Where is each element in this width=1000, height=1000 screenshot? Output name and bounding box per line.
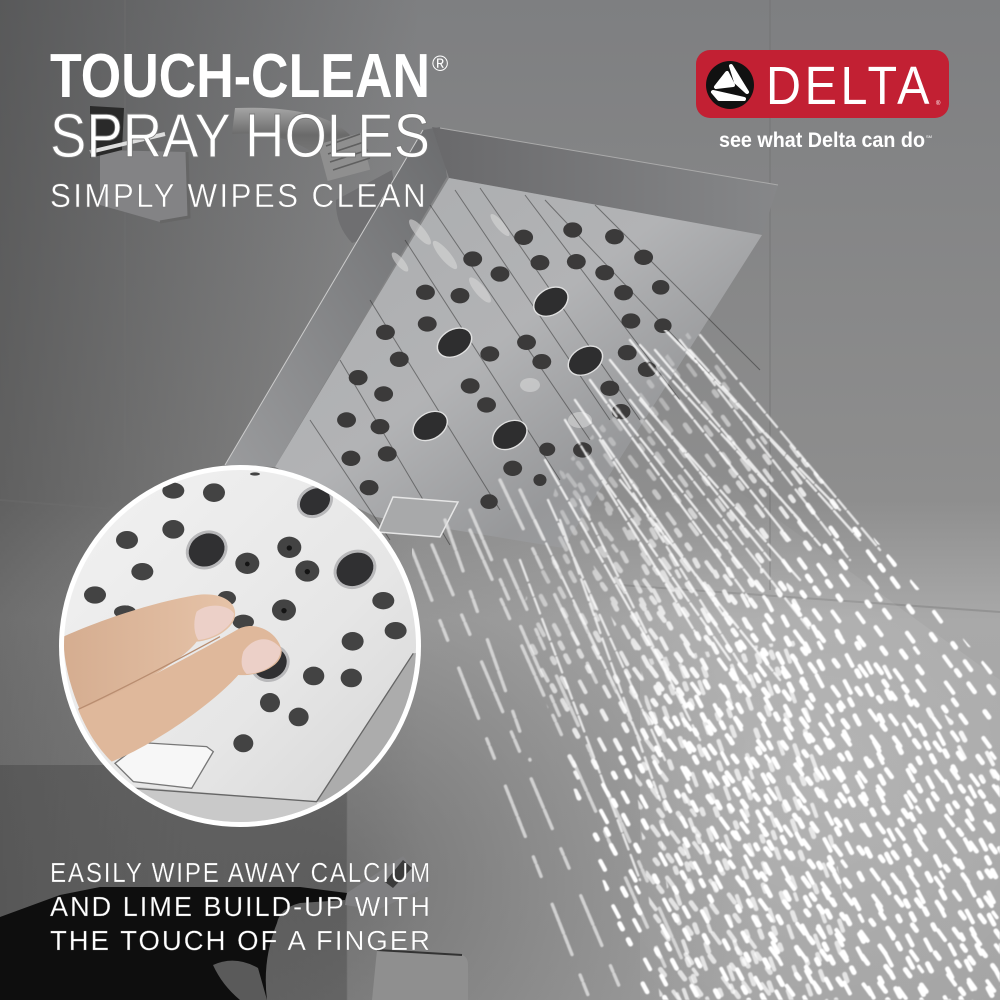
spray dashes	[520, 330, 1000, 1000]
logo mark	[706, 61, 754, 109]
head button	[378, 497, 458, 537]
fingers	[63, 594, 235, 710]
spray streaks	[412, 330, 880, 1000]
head face	[275, 178, 762, 548]
shower arm	[90, 106, 400, 243]
inset button	[115, 743, 213, 788]
title: SPRAY HOLES	[50, 102, 430, 171]
inset large spray holes	[181, 481, 382, 687]
Delta logo: SM	[926, 134, 932, 139]
caption: EASILY WIPE AWAY CALCIUM	[50, 857, 432, 888]
caption: AND LIME BUILD-UP WITH	[50, 891, 432, 922]
Delta logo	[696, 50, 949, 152]
head frame	[225, 127, 447, 467]
title: TOUCH-CLEAN	[50, 42, 430, 111]
Delta logo: ®	[936, 100, 941, 107]
caption: THE TOUCH OF A FINGER	[50, 925, 432, 956]
inset area outside head	[318, 653, 416, 802]
reflected dark lines on face	[310, 188, 760, 545]
title	[50, 42, 448, 214]
water droplets on face	[389, 212, 592, 428]
spray glow	[640, 420, 1000, 1000]
inset rubber nozzles	[84, 472, 407, 752]
water spray	[412, 330, 1000, 1000]
faucet	[0, 856, 468, 1000]
inset nozzle centres	[245, 545, 310, 613]
spray nozzles	[337, 222, 672, 509]
caption	[50, 857, 432, 956]
tagline: see what Delta can do	[719, 129, 925, 152]
Delta logo: DELTA	[766, 56, 933, 116]
shower head	[225, 127, 778, 548]
finger nails	[194, 606, 234, 640]
inset: finger wiping spray holes	[59, 465, 421, 827]
title: ®	[432, 51, 448, 76]
title: SIMPLY WIPES CLEAN	[50, 177, 428, 214]
